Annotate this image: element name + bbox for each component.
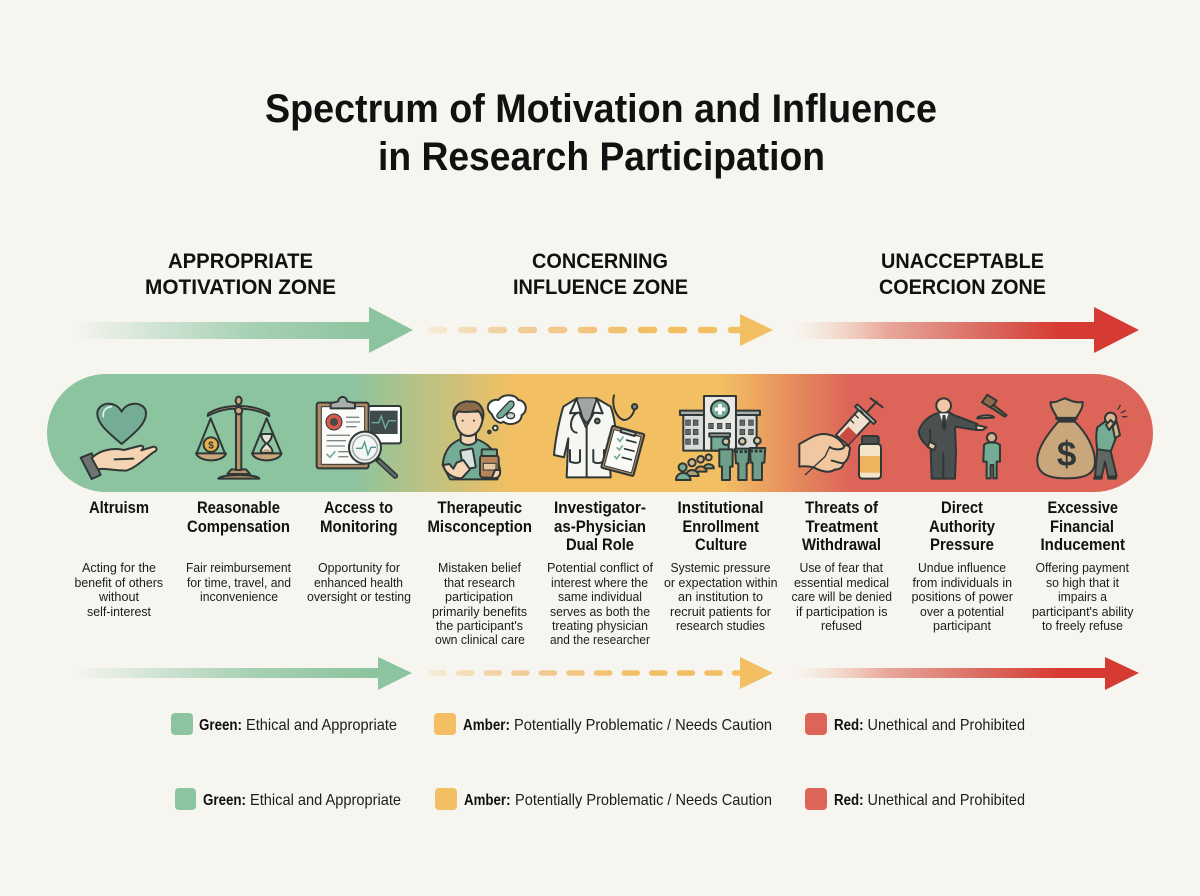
- item: Institutional Enrollment Culture: Culture: [695, 536, 747, 554]
- icon: hospital with staff and patients: [676, 396, 765, 480]
- item: Access to Monitoring: Opportunity for: [318, 560, 401, 575]
- item: Therapeutic Misconception: Misconception: [428, 518, 532, 536]
- item: Access to Monitoring: [307, 499, 411, 604]
- zone heading: unacceptable coercion: UNACCEPTABLE: [881, 249, 1044, 273]
- item: Institutional Enrollment Culture: or expectation within: [664, 575, 778, 590]
- item: Reasonable Compensation: inconvenience: [200, 589, 278, 604]
- icon: balance scale with coin and hourglass: [196, 397, 282, 479]
- legend row 2: red: Red:: [834, 792, 864, 809]
- item: Reasonable Compensation: Compensation: [187, 518, 290, 536]
- item: Threats of Treatment Withdrawal: if participation is: [796, 604, 888, 619]
- item: Therapeutic Misconception: [428, 499, 532, 647]
- item: Altruism: without: [98, 589, 139, 604]
- legend row 1: amber: Potentially Problematic / Needs Caution: [514, 717, 772, 734]
- legend row 2: red: Unethical and Prohibited: [868, 792, 1025, 809]
- item: Institutional Enrollment Culture: recruit patients for: [670, 604, 772, 619]
- item: Access to Monitoring: oversight or testing: [307, 589, 411, 604]
- item: Direct Authority Pressure: from individuals in: [912, 575, 1012, 590]
- icon: hand holding syringe and vial: [799, 398, 883, 479]
- top arrow: green: [72, 307, 413, 353]
- zone heading: concerning influence: INFLUENCE ZONE: [513, 275, 688, 299]
- legend row 2: amber: Potentially Problematic / Needs Caution: [515, 792, 772, 809]
- title: [265, 87, 937, 179]
- legend row 2: green: Ethical and Appropriate: [250, 792, 401, 809]
- item: Threats of Treatment Withdrawal: essential medical: [794, 575, 889, 590]
- item: Access to Monitoring: Access to: [324, 499, 393, 517]
- item: Investigator-as-Physician Dual Role: Investigator-: [554, 499, 646, 517]
- item: Altruism: self-interest: [87, 604, 151, 619]
- item: Direct Authority Pressure: over a potential: [920, 604, 1004, 619]
- legend row 1: green: Green:: [199, 717, 242, 734]
- item: Reasonable Compensation: Reasonable: [197, 499, 280, 517]
- item: Therapeutic Misconception: Therapeutic: [438, 499, 522, 517]
- item: Excessive Financial Inducement: Inducement: [1040, 536, 1125, 554]
- item: Institutional Enrollment Culture: Systemic pressure: [670, 560, 770, 575]
- item: Threats of Treatment Withdrawal: Use of fear that: [800, 560, 883, 575]
- icon: balance scale with coin and hourglass: $: [208, 440, 214, 451]
- item: Investigator-as-Physician Dual Role: interest where the: [551, 575, 648, 590]
- item: Reasonable Compensation: [186, 499, 291, 604]
- zone heading: appropriate motivation: APPROPRIATE: [168, 249, 313, 273]
- legend row 1: green: Ethical and Appropriate: [246, 717, 397, 734]
- item: Excessive Financial Inducement: Offering payment: [1036, 560, 1129, 575]
- item: Institutional Enrollment Culture: research studies: [676, 618, 765, 633]
- item: Altruism: [74, 499, 163, 619]
- legend row 1: amber: Amber:: [463, 717, 510, 734]
- zone heading: unacceptable coercion: [879, 249, 1046, 299]
- title: Spectrum of Motivation and Influence: [265, 87, 937, 131]
- legend row 2: red: [805, 788, 1025, 810]
- legend row 2: green: [175, 788, 401, 810]
- item: Direct Authority Pressure: Undue influence: [918, 560, 1006, 575]
- icon: money bag and distressed person: [1037, 398, 1127, 479]
- item: Investigator-as-Physician Dual Role: treating physician: [552, 618, 648, 633]
- item: Altruism: benefit of others: [74, 575, 163, 590]
- item: Excessive Financial Inducement: to freely refuse: [1042, 618, 1123, 633]
- item: Threats of Treatment Withdrawal: Threats of: [805, 499, 878, 517]
- item: Excessive Financial Inducement: Financial: [1050, 518, 1114, 536]
- item: Threats of Treatment Withdrawal: [792, 499, 892, 633]
- item: Reasonable Compensation: Fair reimbursement: [186, 560, 291, 575]
- item: Reasonable Compensation: for time, travel, and: [187, 575, 291, 590]
- item: Direct Authority Pressure: Direct: [941, 499, 983, 517]
- item: Threats of Treatment Withdrawal: Treatment: [806, 518, 878, 536]
- legend row 2: amber: Amber:: [464, 792, 510, 809]
- title: in Research Participation: [378, 135, 825, 179]
- legend row 2: green: Green:: [203, 792, 246, 809]
- item: Altruism: Altruism: [89, 499, 149, 517]
- zone heading: appropriate motivation: MOTIVATION ZONE: [145, 275, 336, 299]
- bottom arrow: amber dashed: [431, 657, 773, 689]
- item: Threats of Treatment Withdrawal: care will be denied: [792, 589, 892, 604]
- icon: money bag and distressed person: $: [1057, 435, 1076, 474]
- item: Direct Authority Pressure: participant: [933, 618, 991, 633]
- item: Investigator-as-Physician Dual Role: [547, 499, 653, 647]
- item: Direct Authority Pressure: [912, 499, 1014, 633]
- item: Therapeutic Misconception: that research: [444, 575, 515, 590]
- icon: patient with pills and thought bubble: [443, 395, 526, 479]
- item: Investigator-as-Physician Dual Role: as-Physician: [554, 518, 646, 536]
- legend row 1: red: [805, 713, 1025, 735]
- zone heading: concerning influence: [513, 249, 688, 299]
- item: Excessive Financial Inducement: [1032, 499, 1134, 633]
- item: Therapeutic Misconception: participation: [445, 589, 513, 604]
- legend row 1: green: [171, 713, 397, 735]
- item: Excessive Financial Inducement: Excessive: [1048, 499, 1118, 517]
- item: Access to Monitoring: Monitoring: [320, 518, 398, 536]
- item: Institutional Enrollment Culture: [664, 499, 778, 633]
- item: Therapeutic Misconception: Mistaken belief: [438, 560, 521, 575]
- top arrow: amber dashed: [431, 314, 773, 346]
- item: Direct Authority Pressure: Authority: [929, 518, 996, 536]
- item: Investigator-as-Physician Dual Role: serves as both the: [550, 604, 650, 619]
- spectrum band with icons: [47, 374, 1153, 492]
- item: Investigator-as-Physician Dual Role: Dual Role: [566, 536, 634, 554]
- item: Direct Authority Pressure: positions of power: [912, 589, 1014, 604]
- item: Investigator-as-Physician Dual Role: Potential conflict of: [547, 560, 653, 575]
- item: Direct Authority Pressure: Pressure: [930, 536, 994, 554]
- item: Institutional Enrollment Culture: Institutional: [678, 499, 764, 517]
- item: Therapeutic Misconception: own clinical care: [435, 632, 525, 647]
- item: Investigator-as-Physician Dual Role: same individual: [558, 589, 642, 604]
- item: Threats of Treatment Withdrawal: Withdrawal: [802, 536, 881, 554]
- item: Therapeutic Misconception: primarily benefits: [432, 604, 527, 619]
- item: Threats of Treatment Withdrawal: refused: [821, 618, 862, 633]
- item: Investigator-as-Physician Dual Role: and the researcher: [550, 632, 651, 647]
- legend row 1: amber: [434, 713, 772, 735]
- zone heading: concerning influence: CONCERNING: [532, 249, 668, 273]
- item: Excessive Financial Inducement: so high that it: [1046, 575, 1119, 590]
- item: Institutional Enrollment Culture: an institution to: [678, 589, 763, 604]
- zone heading: unacceptable coercion: COERCION ZONE: [879, 275, 1046, 299]
- legend row 1: red: Red:: [834, 717, 864, 734]
- legend row 1: red: Unethical and Prohibited: [868, 717, 1025, 734]
- item: Access to Monitoring: enhanced health: [314, 575, 403, 590]
- legend row 2: amber: [435, 788, 772, 810]
- item: Altruism: Acting for the: [82, 560, 156, 575]
- bottom arrow: green: [72, 657, 412, 690]
- icon: clipboard, monitor and magnifier: [317, 397, 401, 476]
- item: Excessive Financial Inducement: impairs a: [1058, 589, 1108, 604]
- item: Excessive Financial Inducement: participant's ability: [1032, 604, 1134, 619]
- icon: doctor coat, stethoscope and clipboard: [554, 395, 645, 477]
- zone heading: appropriate motivation: [145, 249, 336, 299]
- item: Institutional Enrollment Culture: Enrollment: [682, 518, 759, 536]
- icon: heart over open hand: [81, 404, 157, 479]
- top arrow: red: [795, 307, 1139, 353]
- icon: authority figure pointing with gavel: [919, 395, 1007, 479]
- item: Therapeutic Misconception: the participant's: [436, 618, 523, 633]
- bottom arrow: red: [790, 657, 1139, 690]
